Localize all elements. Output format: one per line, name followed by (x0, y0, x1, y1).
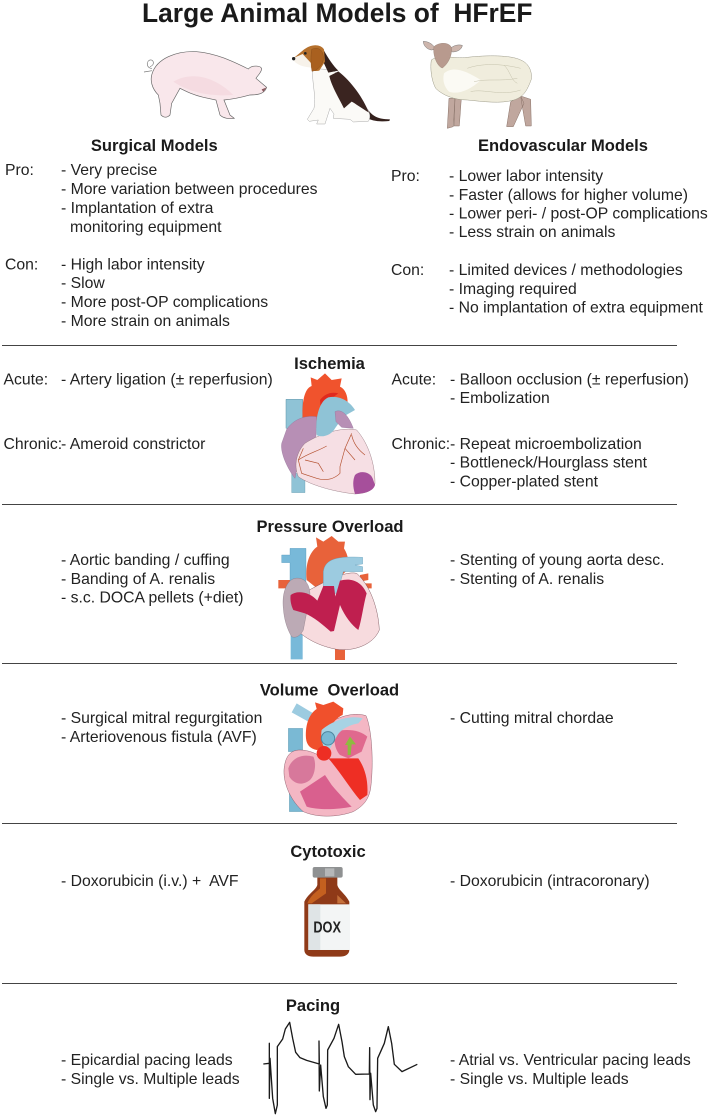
icon: ischemic heart (281, 373, 375, 494)
text block: endovascular pro: Pro: (391, 168, 420, 185)
heading: pacing: Pacing (286, 996, 340, 1015)
text block: endovascular pro: - Lower peri- / post-OP complications (449, 206, 708, 222)
text block: surgical pro: Pro: (5, 162, 34, 179)
text block: ischemia endovascular: Chronic: (392, 436, 450, 453)
text block: pressure endovascular (450, 552, 665, 588)
text block: pressure surgical (61, 552, 244, 606)
text block: surgical con: Con: (5, 256, 38, 274)
heading: volume overload: Volume Overload (260, 680, 399, 700)
text block: ischemia endovascular: Acute: (392, 372, 436, 388)
text block: pressure endovascular: - Stenting of young aorta desc. (450, 552, 665, 569)
text block: cytotoxic surgical: - Doxorubicin (i.v.) + AVF (61, 873, 239, 890)
heading: endovascular models: Endovascular Models (478, 136, 648, 155)
text block: volume endovascular: - Cutting mitral chordae (450, 710, 614, 727)
text block: ischemia endovascular: - Embolization (450, 390, 550, 407)
text block: ischemia endovascular: - Balloon occlusion (± reperfusion) (450, 372, 689, 388)
icon: DOX vial (304, 867, 350, 957)
text block: volume surgical (61, 710, 262, 746)
text block: endovascular pro: - Lower labor intensity (449, 168, 603, 185)
text block: endovascular con (391, 262, 704, 316)
text block: surgical con: - Slow (61, 275, 105, 292)
text block: endovascular con: - Limited devices / methodologies (449, 262, 683, 279)
chart: ECG pacing trace (263, 1022, 417, 1114)
text block: pacing surgical: - Epicardial pacing leads (61, 1052, 233, 1069)
heading: ischemia: Ischemia (294, 354, 366, 373)
text block: endovascular con: Con: (391, 262, 424, 279)
text block: pacing surgical (61, 1052, 240, 1088)
text block: endovascular con: - No implantation of extra equipment (449, 300, 704, 316)
text block: ischemia endovascular (392, 372, 689, 490)
text block: pacing endovascular (450, 1052, 691, 1088)
text block: endovascular pro: - Less strain on animals (449, 224, 615, 241)
heading: surgical models: Surgical Models (91, 136, 218, 155)
icon: volume overload heart (284, 702, 372, 816)
text block: pacing endovascular: - Atrial vs. Ventricular pacing leads (450, 1052, 691, 1069)
text block: surgical con: - More strain on animals (61, 313, 230, 330)
text block: cytotoxic endovascular: - Doxorubicin (intracoronary) (450, 873, 650, 890)
text block: volume surgical: - Surgical mitral regurgitation (61, 710, 262, 727)
text block: ischemia endovascular: - Bottleneck/Hourglass stent (450, 454, 648, 472)
text block: surgical pro: monitoring equipment (70, 219, 222, 236)
heading: cytotoxic: Cytotoxic (290, 842, 366, 861)
text block: endovascular pro (391, 168, 708, 241)
text block: ischemia surgical: - Artery ligation (± reperfusion) (61, 372, 273, 388)
icon: DOX vial: DOX (313, 920, 342, 937)
text block: ischemia endovascular: - Copper-plated stent (450, 474, 599, 490)
text block: ischemia endovascular: - Repeat microembolization (450, 436, 642, 453)
text block: pacing surgical: - Single vs. Multiple leads (61, 1071, 240, 1088)
text block: ischemia surgical: Chronic: (4, 436, 62, 453)
heading: pressure overload: Pressure Overload (256, 517, 404, 536)
text block: surgical con (5, 256, 268, 330)
text block: endovascular con: - Imaging required (449, 281, 577, 298)
icon: pressure overload heart (278, 536, 379, 660)
text block: ischemia surgical: Acute: (4, 372, 48, 388)
text block: surgical pro: - Implantation of extra (61, 200, 214, 217)
text block: surgical pro (5, 162, 318, 236)
text block: surgical pro: - Very precise (61, 162, 158, 179)
icon: sheep (423, 41, 531, 128)
text block: volume surgical: - Arteriovenous fistula (AVF) (61, 729, 257, 746)
text block: endovascular pro: - Faster (allows for higher volume) (449, 187, 688, 204)
text block: ischemia surgical: - Ameroid constrictor (61, 436, 205, 453)
text block: pressure endovascular: - Stenting of A. renalis (450, 571, 604, 588)
text block: surgical pro: - More variation between procedures (61, 181, 318, 198)
icon: pig (144, 52, 267, 119)
text block: pressure surgical: - s.c. DOCA pellets (+diet) (61, 590, 244, 606)
text block: pressure surgical: - Banding of A. renalis (61, 571, 215, 588)
text block: pacing endovascular: - Single vs. Multiple leads (450, 1071, 629, 1088)
text block: pressure surgical: - Aortic banding / cuffing (61, 552, 230, 569)
text block: surgical con: - High labor intensity (61, 256, 205, 274)
text block: ischemia surgical (4, 372, 273, 453)
text block: surgical con: - More post-OP complications (61, 294, 268, 311)
icon: dog (292, 45, 390, 124)
